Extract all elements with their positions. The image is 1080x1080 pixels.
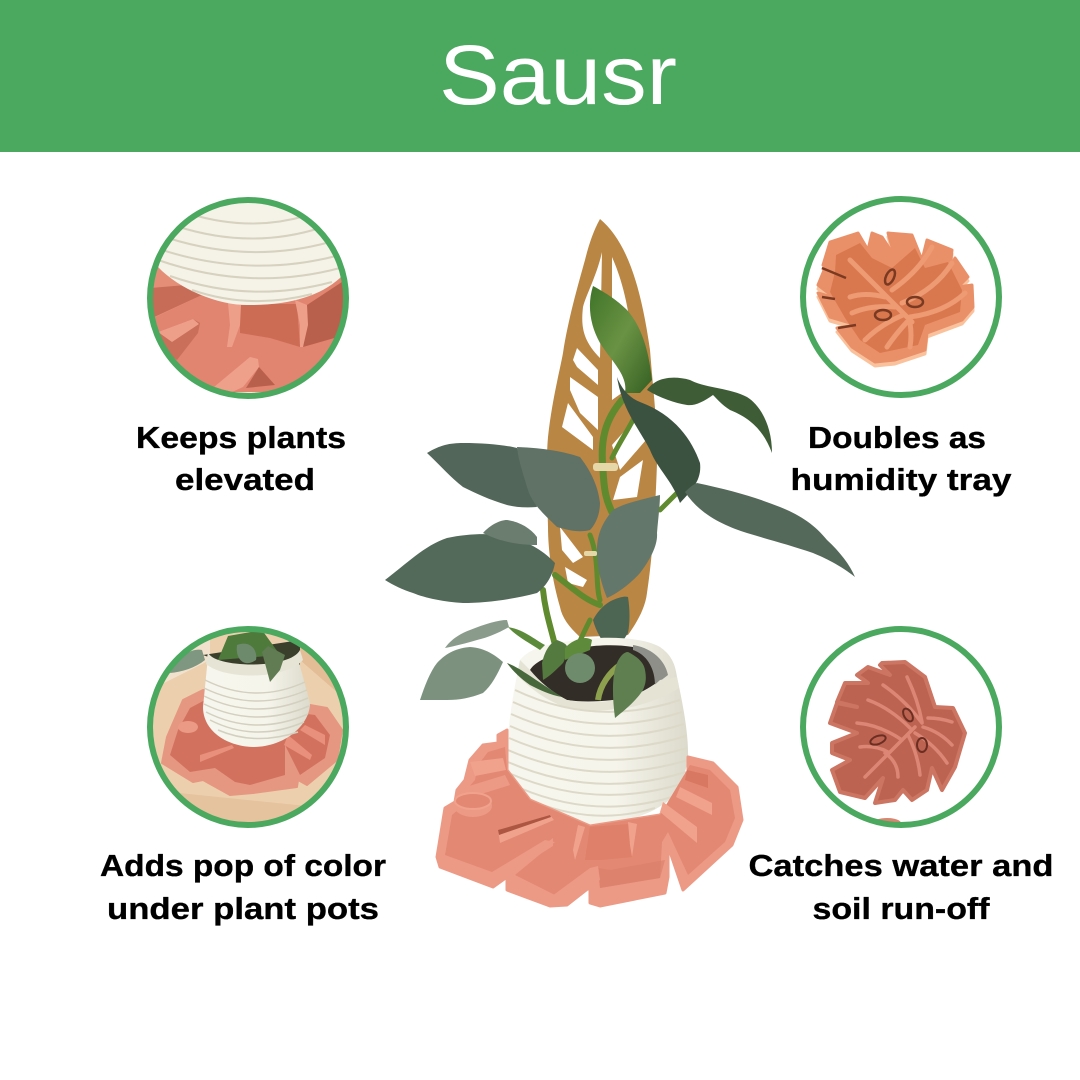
- panel: adds pop of color: [100, 629, 386, 926]
- panel: keeps plants elevated: [136, 200, 346, 497]
- leaves and stems in the pot: [507, 627, 646, 718]
- label: Adds pop of color: [100, 848, 386, 883]
- icon: close-up of elevated pot: [150, 200, 346, 400]
- label: [790, 420, 1012, 497]
- label: [748, 848, 1054, 926]
- label: [100, 848, 386, 926]
- leaves: [385, 286, 855, 700]
- icon: monstera tray, terracotta: [803, 629, 999, 828]
- label: [136, 420, 346, 497]
- product photo: plant in pot on saucer: [385, 219, 855, 906]
- label: humidity tray: [790, 462, 1012, 497]
- title: Sausr: [439, 28, 677, 122]
- icon: monstera tray, top view: [803, 199, 999, 395]
- stems: [543, 400, 680, 690]
- label: under plant pots: [107, 891, 379, 926]
- label: elevated: [175, 462, 315, 497]
- wooden leaf trellis: [547, 219, 657, 637]
- label: Catches water and: [748, 848, 1054, 883]
- white ribbed pot with soil: [506, 638, 688, 824]
- monstera saucer: [437, 730, 742, 906]
- panel: doubles as humidity tray: [790, 199, 1012, 497]
- header banner: [0, 0, 1080, 152]
- rubber ties: [584, 463, 618, 556]
- label: Doubles as: [808, 420, 986, 455]
- label: Keeps plants: [136, 420, 346, 455]
- icon: pot on saucer on wood table: [150, 629, 346, 826]
- label: soil run-off: [812, 891, 990, 926]
- panel: catches water and soil run-off: [748, 629, 1054, 926]
